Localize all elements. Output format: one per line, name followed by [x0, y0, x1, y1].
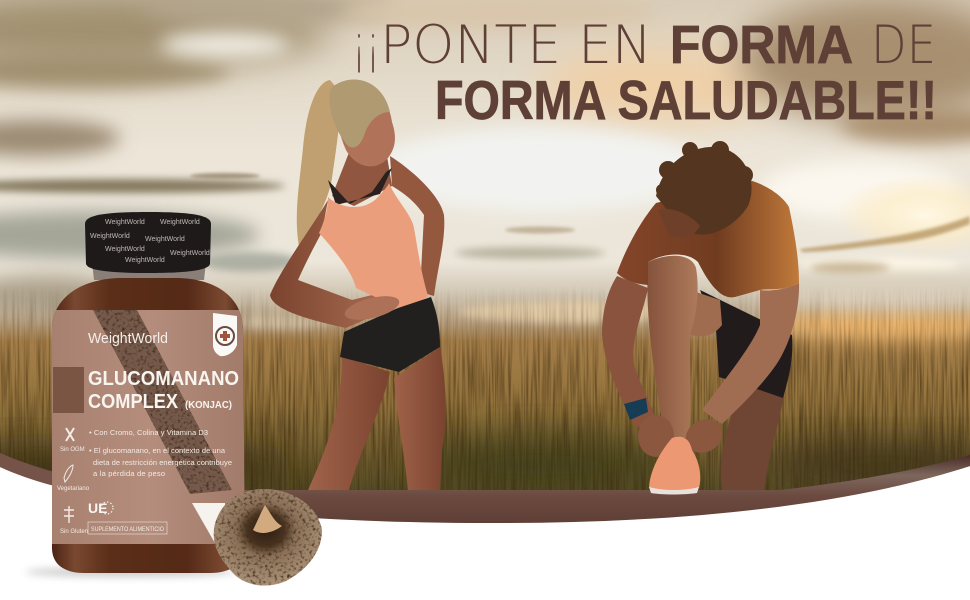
quality badge: [213, 313, 237, 356]
woman left arm: [270, 200, 398, 328]
man: [602, 141, 799, 490]
product bullets: • Con Cromo, Colina y Vitamina D3: [89, 428, 208, 437]
woman head: [336, 86, 395, 166]
dark diagonal band: [93, 310, 232, 494]
woman chest: [332, 150, 392, 206]
bottle body: [52, 278, 245, 573]
background: grass field: [0, 262, 970, 502]
man thigh and shin: [647, 256, 698, 438]
band texture: [93, 310, 233, 494]
wooden plank: [240, 455, 970, 523]
dark rectangle: [53, 367, 84, 413]
woman hand: [342, 292, 402, 324]
side icons: [57, 428, 90, 535]
man right arm: [702, 283, 799, 424]
woman left leg: [308, 356, 390, 490]
side icons: Sin OGM: [60, 447, 85, 453]
woman right leg: [394, 347, 446, 490]
konjac root: [212, 488, 324, 588]
product title: [88, 367, 239, 413]
headline exclamation marks: ¡¡: [352, 15, 380, 76]
man shirt: [617, 180, 799, 297]
bottle shadow: [25, 567, 235, 577]
headline line 1 bold: FORMA: [670, 15, 853, 75]
product bullets: • El glucomanano, en el contexto de una: [89, 446, 226, 455]
root sprout: [253, 505, 282, 533]
man wrist watch: [624, 398, 648, 420]
bottle cap: WeightWorld: [105, 219, 145, 226]
woman: [270, 80, 446, 490]
brand name: WeightWorld: [88, 331, 168, 347]
bottle cap: WeightWorld: [145, 236, 185, 243]
headline: [352, 15, 937, 131]
product bullets: a la pérdida de peso: [93, 469, 165, 478]
bottle cap: WeightWorld: [105, 246, 145, 253]
bottle cap: WeightWorld: [90, 233, 130, 240]
brown swoosh band: [0, 453, 970, 523]
bottle: [25, 212, 247, 577]
woman right arm: [390, 156, 444, 296]
EU badge: UE: [88, 500, 107, 516]
left swoosh: [0, 453, 120, 498]
product title: COMPLEX: [88, 390, 178, 413]
side icons: Vegetariano: [57, 486, 90, 492]
white foreground curve: [0, 466, 970, 600]
woman tank top: [319, 183, 428, 308]
white triangle: [192, 503, 225, 545]
headline line 1 light end: DE: [871, 15, 936, 76]
man shoe: [649, 437, 700, 494]
man right hand: [680, 413, 728, 459]
side icons: Sin Gluten: [60, 529, 88, 535]
supplement tag: SUPLEMENTO ALIMENTICIO: [91, 526, 164, 533]
bottle neck ring: [92, 262, 206, 280]
man back leg: [721, 380, 784, 490]
man curly hair: [656, 141, 753, 234]
bottle cap: WeightWorld: [170, 250, 210, 257]
man left arm: [602, 276, 656, 428]
man belly: [688, 290, 722, 336]
bottle cap: WeightWorld: [160, 219, 200, 226]
woman dark sports bra: [328, 168, 392, 205]
bottle cap: [85, 212, 211, 273]
woman blonde hair: [330, 80, 390, 148]
headline line 1 light: PONTE EN: [380, 15, 652, 76]
product bullets: dieta de restricción energética contribuye: [93, 458, 232, 467]
man face: [658, 209, 700, 238]
woman shorts: [340, 297, 440, 372]
root texture: [212, 488, 324, 588]
bottle cap: WeightWorld: [125, 257, 165, 264]
product bullets: [89, 428, 232, 478]
man shorts: [700, 290, 792, 398]
product title: (KONJAC): [185, 399, 232, 411]
product title: GLUCOMANANO: [88, 367, 239, 390]
supplement tag: [88, 522, 167, 534]
man left hand: [638, 415, 674, 457]
woman ponytail: [297, 80, 340, 252]
bottle label: [50, 310, 247, 545]
